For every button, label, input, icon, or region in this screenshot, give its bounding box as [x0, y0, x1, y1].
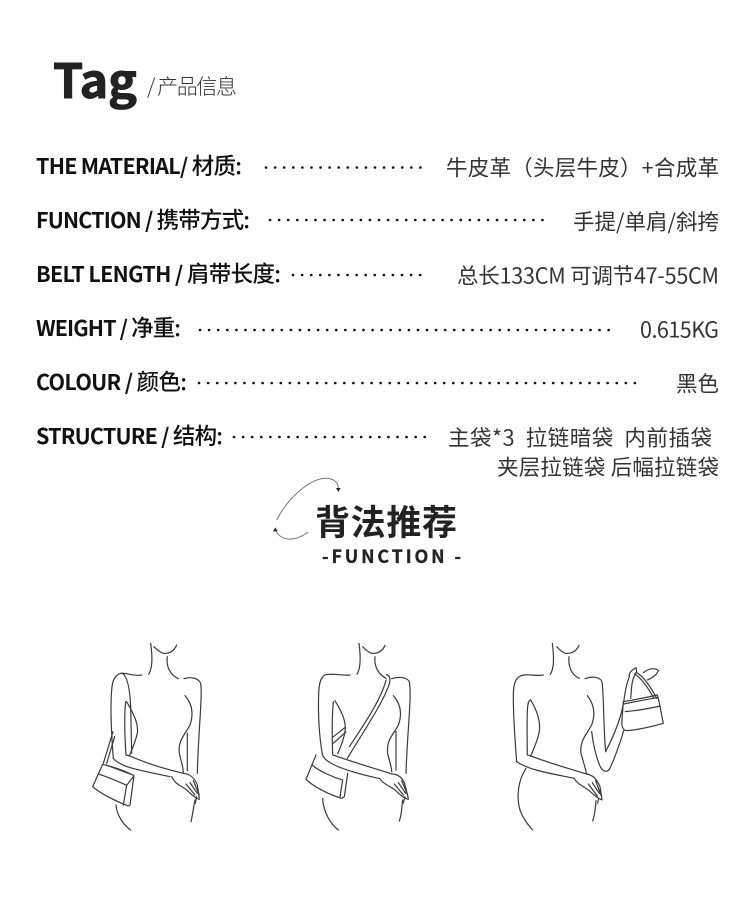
spec row: structure	[36, 419, 719, 482]
spec row: colour	[36, 365, 719, 398]
spec row: belt length: 总长133CM 可调节47-55CM	[457, 260, 719, 290]
spec row: weight: 0.615KG	[640, 314, 719, 344]
spec row: structure: 夹层拉链袋 后幅拉链袋	[497, 451, 719, 482]
spec row: function: 手提/单肩/斜挎	[573, 206, 719, 236]
spec row: function	[36, 203, 719, 236]
spec row: weight: WEIGHT / 净重:	[36, 311, 181, 343]
spec row: structure: 主袋*3 拉链暗袋 内前插袋	[448, 422, 712, 452]
section heading: recommended ways to carry	[315, 495, 461, 569]
spec row: belt length	[36, 257, 719, 290]
illustration: crossbody carry	[306, 643, 410, 830]
section heading: recommended ways to carry: -FUNCTION -	[322, 543, 461, 569]
spec row: colour: COLOUR / 颜色:	[36, 365, 187, 397]
heading: Tag	[53, 43, 237, 112]
heading: Tag: Tag	[53, 43, 137, 112]
spec row: weight	[36, 311, 719, 344]
heading: Tag: / 产品信息	[147, 71, 237, 101]
section heading: recommended ways to carry: 背法推荐	[315, 495, 457, 546]
spec row: function: FUNCTION / 携带方式:	[36, 203, 250, 235]
spec row: belt length: BELT LENGTH / 肩带长度:	[36, 257, 281, 289]
spec row: material: THE MATERIAL/ 材质:	[36, 149, 242, 181]
spec row: material	[36, 149, 719, 182]
illustration: shoulder carry	[93, 643, 201, 830]
illustration: hand carry	[513, 643, 663, 830]
icon: curved arrows around heading	[273, 478, 341, 539]
spec row: colour: 黑色	[676, 368, 719, 398]
spec row: structure: STRUCTURE / 结构:	[36, 419, 223, 451]
spec row: material: 牛皮革（头层牛皮）+合成革	[446, 152, 719, 182]
